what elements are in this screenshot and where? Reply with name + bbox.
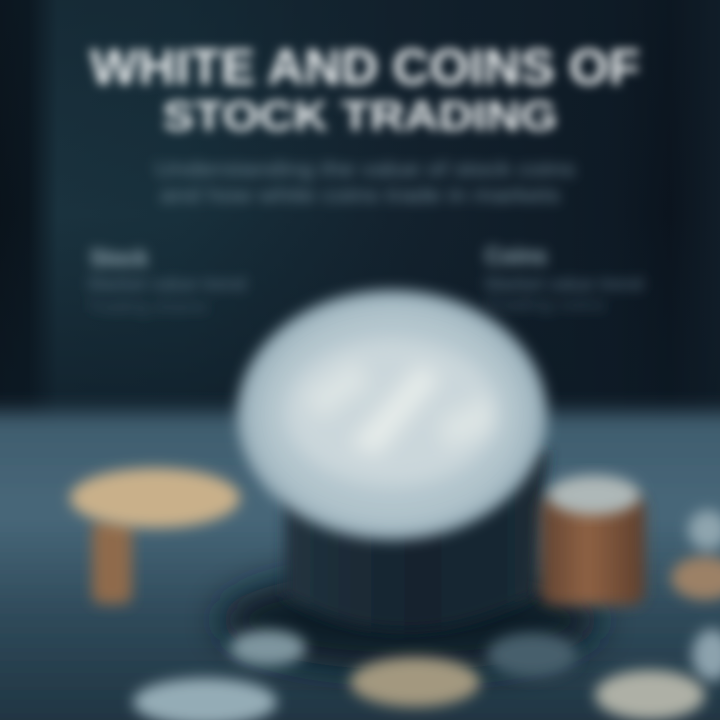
scattered bottom coins <box>133 630 705 720</box>
left column text: Stock <box>90 245 149 272</box>
coin face highlights <box>284 338 500 486</box>
subtitle text: Understanding the value of stock coins <box>155 159 575 181</box>
left column text: Trading shares <box>88 299 208 316</box>
disc <box>70 468 240 528</box>
coin body <box>285 450 548 630</box>
title: WHITE AND COINS OF <box>90 39 640 95</box>
title <box>90 39 640 139</box>
right column text: Market value trend <box>485 274 643 294</box>
right column text <box>485 243 643 314</box>
right edge coins <box>671 510 720 681</box>
large coin <box>237 290 548 630</box>
table surface <box>0 412 720 720</box>
title: STOCK TRADING <box>162 92 558 139</box>
coin face <box>237 290 547 540</box>
tan disc on stem <box>70 468 240 604</box>
background wall <box>0 0 720 430</box>
right column text: Trading coins <box>485 297 605 314</box>
copper coin stack <box>540 475 645 605</box>
left column text <box>88 245 246 316</box>
left column text: Market value trend <box>88 274 246 294</box>
shadow beneath coin <box>220 570 600 670</box>
subtitle text <box>155 159 575 207</box>
right column text: Coins <box>485 243 547 270</box>
subtitle text: and how white coins trade in markets <box>160 185 560 207</box>
stem <box>92 520 132 604</box>
